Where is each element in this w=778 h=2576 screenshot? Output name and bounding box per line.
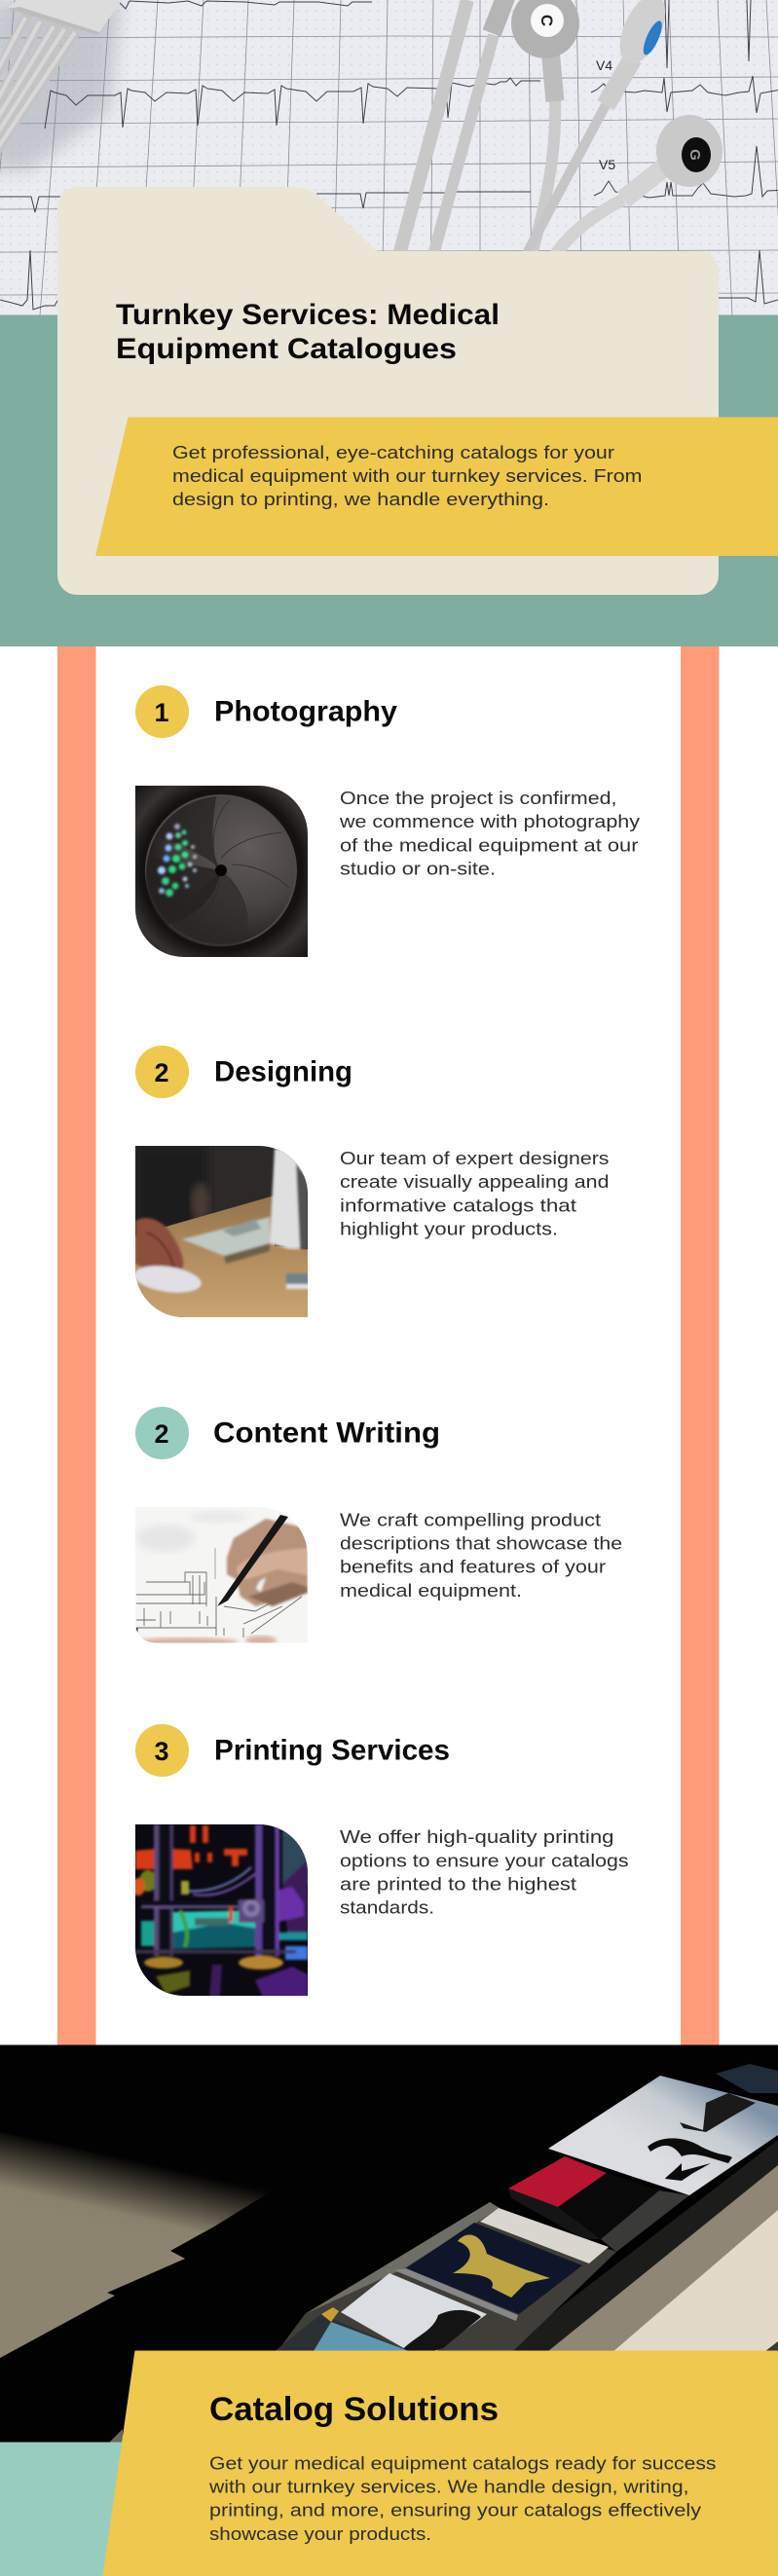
step 4 text: are printed to the highest bbox=[340, 1875, 576, 1895]
step 2 text: create visually appealing and bbox=[340, 1172, 610, 1192]
step 3 number badge: 2 bbox=[154, 1419, 169, 1449]
ledge and cloth bbox=[503, 2140, 778, 2351]
title: Turnkey Services: Medical bbox=[116, 299, 500, 331]
step 1 number badge: 1 bbox=[154, 698, 169, 727]
step 2 text: informative catalogs that bbox=[340, 1196, 576, 1215]
conclusion heading: Catalog Solutions bbox=[209, 2391, 499, 2428]
step 4 text: We offer high-quality printing bbox=[340, 1827, 613, 1847]
conclusion text: printing, and more, ensuring your catalogs effectively bbox=[209, 2500, 701, 2520]
step 3 heading: Content Writing bbox=[213, 1417, 440, 1449]
icon: electrode cables bbox=[399, 0, 664, 255]
label V4: V4 bbox=[596, 57, 612, 73]
step 4 text: standards. bbox=[340, 1898, 434, 1918]
step 4 number badge bbox=[135, 1724, 189, 1777]
icon: top-left cable bundle bbox=[0, 0, 122, 161]
step 2 number badge: 2 bbox=[154, 1058, 169, 1087]
icon: electrode G bbox=[656, 115, 722, 187]
step 2 text: Our team of expert designers bbox=[340, 1149, 610, 1168]
intro text: Get professional, eye-catching catalogs for your bbox=[172, 443, 614, 462]
panel: folder card bbox=[57, 187, 719, 595]
step 1 text: of the medical equipment at our bbox=[340, 835, 639, 855]
step 1 text: we commence with photography bbox=[339, 812, 640, 831]
step 1 number badge bbox=[135, 685, 189, 738]
step 1 image: camera aperture bbox=[135, 786, 308, 957]
intro text: medical equipment with our turnkey services. From bbox=[172, 466, 643, 486]
step 3 text: We craft compelling product bbox=[340, 1511, 601, 1530]
step 3 image: hand sketching bbox=[131, 1507, 308, 1647]
intro yellow band bbox=[95, 417, 778, 556]
catalog: blue book bbox=[275, 2307, 409, 2351]
step 1 text: Once the project is confirmed, bbox=[340, 789, 617, 808]
step 1 text bbox=[339, 789, 640, 878]
step 4 heading: Printing Services bbox=[214, 1735, 450, 1766]
title bbox=[116, 299, 500, 365]
bottom teal block bbox=[0, 2442, 136, 2576]
bottom photo: catalogs on a ledge bbox=[0, 2044, 778, 2443]
hero photo: ECG paper with electrode cables bbox=[0, 0, 778, 315]
catalog: white book with ink bbox=[341, 2273, 487, 2351]
step 4 text: options to ensure your catalogs bbox=[340, 1852, 629, 1871]
icon: electrode G: G bbox=[686, 149, 703, 161]
label V5: V5 bbox=[599, 157, 615, 172]
panel: left orange bar bbox=[57, 646, 95, 2045]
conclusion text bbox=[208, 2453, 717, 2544]
step 2 number badge bbox=[135, 1046, 189, 1098]
icon: electrode C: C bbox=[537, 15, 556, 26]
conclusion yellow panel bbox=[103, 2350, 778, 2576]
step 4 image: 3D printer bbox=[131, 1824, 310, 1998]
catalog: white sketch book bbox=[548, 2064, 778, 2195]
intro text bbox=[172, 443, 643, 509]
catalog: navy and gold book bbox=[394, 2208, 609, 2321]
icon: electrode C bbox=[511, 0, 579, 58]
step 1 text: studio or on-site. bbox=[340, 859, 496, 878]
step 4 number badge: 3 bbox=[154, 1737, 169, 1766]
title: Equipment Catalogues bbox=[116, 333, 457, 365]
panel: right orange bar bbox=[681, 646, 719, 2045]
step 2 heading: Designing bbox=[214, 1055, 352, 1088]
mat under catalogs bbox=[278, 2202, 616, 2351]
step 3 text: benefits and features of your bbox=[340, 1558, 606, 1577]
conclusion text: Get your medical equipment catalogs ready for success bbox=[209, 2453, 717, 2473]
step 3 number badge bbox=[135, 1407, 189, 1459]
step 1 heading: Photography bbox=[214, 695, 397, 728]
icon: electrode blue bbox=[619, 0, 666, 62]
intro text: design to printing, we handle everything. bbox=[172, 490, 549, 509]
step 2 image: designer at desk bbox=[132, 1146, 310, 1317]
step 2 text bbox=[340, 1149, 610, 1238]
step 3 text: medical equipment. bbox=[340, 1581, 522, 1601]
step 3 text bbox=[340, 1511, 622, 1601]
conclusion text: showcase your products. bbox=[209, 2524, 431, 2544]
step 2 text: highlight your products. bbox=[340, 1219, 558, 1238]
top teal band bbox=[0, 315, 778, 646]
step 3 text: descriptions that showcase the bbox=[340, 1534, 622, 1554]
conclusion text: with our turnkey services. We handle design, writing, bbox=[208, 2477, 689, 2496]
step 4 text bbox=[340, 1827, 629, 1918]
catalog: red book bbox=[508, 2156, 689, 2252]
